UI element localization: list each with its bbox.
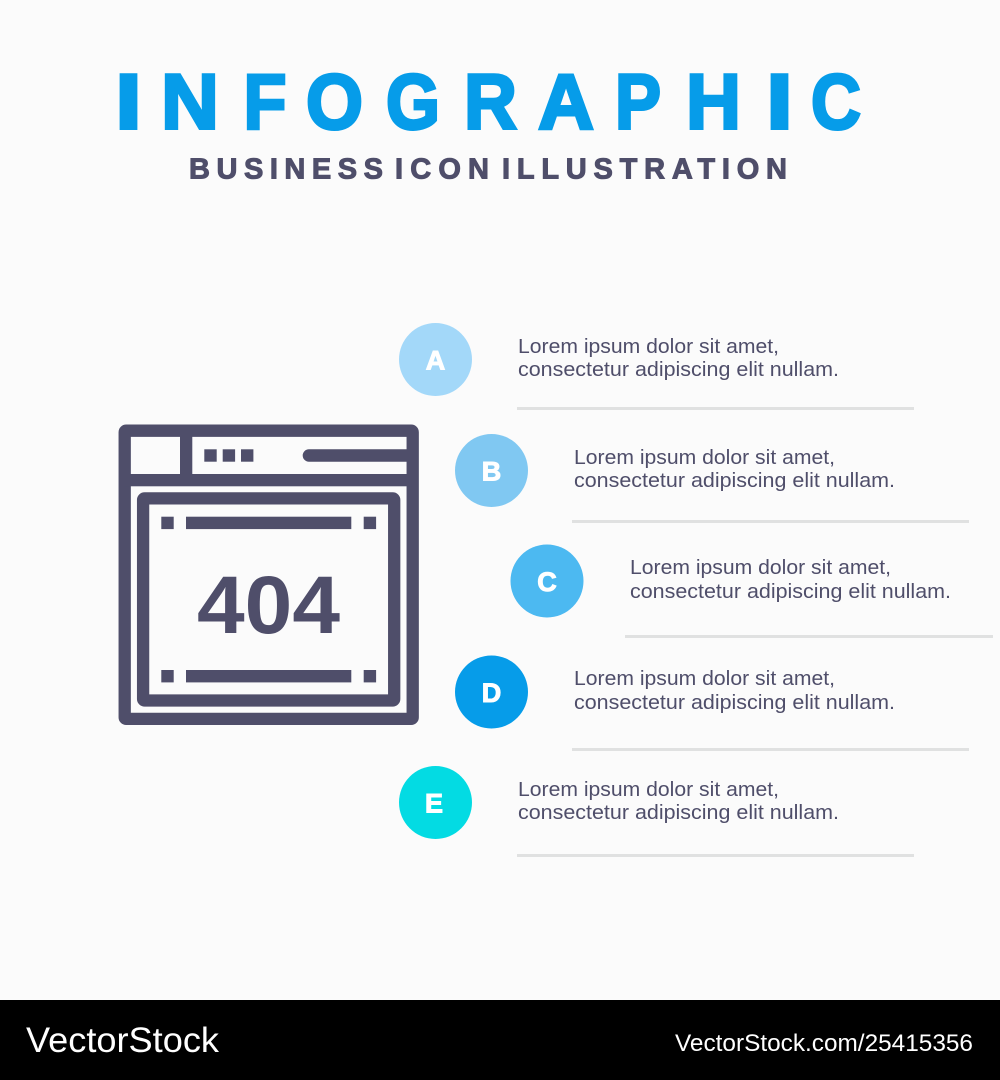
item B: consectetur adipiscing elit nullam. [574,469,895,492]
title: I [766,58,793,146]
title: P [615,58,661,146]
item C: consectetur adipiscing elit nullam. [630,580,951,603]
footer image id: VectorStock.com/25415356 [675,1030,973,1057]
icon: browser window with 404 error [124,430,413,719]
title: F [244,58,286,146]
item D: Lorem ipsum dolor sit amet, [574,667,835,690]
subtitle: ICON [395,154,489,186]
title: H [686,58,741,146]
title: R [464,58,517,146]
title: N [161,58,219,146]
footer logo text: VectorStock [26,1021,220,1060]
icon: browser window with 404 error: 404 [197,560,340,651]
item B: B [482,456,501,486]
item E [399,766,914,857]
item C: C [537,567,557,597]
item D [455,656,969,751]
item A [399,323,914,410]
subtitle: ILLUSTRATION [502,154,787,186]
title: A [538,58,594,146]
subtitle: BUSINESS [189,154,383,186]
title: G [386,58,440,146]
title: O [306,58,363,146]
item D: D [482,678,501,708]
item A: Lorem ipsum dolor sit amet, [518,335,779,358]
footer bar [0,1000,1000,1080]
item E: consectetur adipiscing elit nullam. [518,801,839,824]
title: C [811,58,861,146]
item A: consectetur adipiscing elit nullam. [518,358,839,381]
item C: Lorem ipsum dolor sit amet, [630,556,891,579]
item A: A [426,346,445,376]
item C [510,544,993,638]
item B: Lorem ipsum dolor sit amet, [574,446,835,469]
subtitle [189,154,787,186]
item D: consectetur adipiscing elit nullam. [574,691,895,714]
item B [455,434,969,523]
title: I [115,58,142,146]
item E: Lorem ipsum dolor sit amet, [518,778,779,801]
title [115,58,861,146]
item E: E [425,788,443,818]
